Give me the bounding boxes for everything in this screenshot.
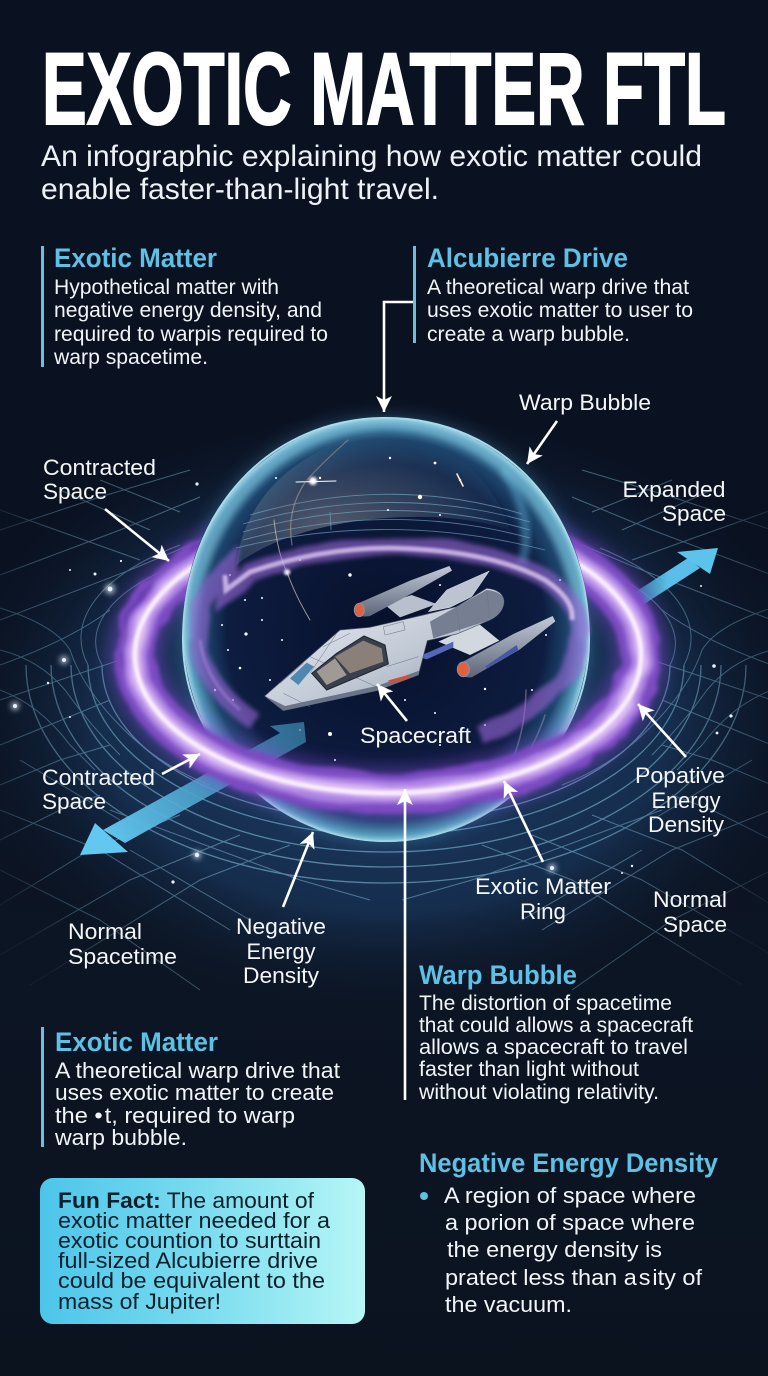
- panel: alcubierre drive: Alcubierre Drive: [427, 243, 628, 273]
- hull: [265, 588, 504, 711]
- inner ring seen through bubble: [198, 546, 581, 735]
- subtitle: [41, 140, 702, 206]
- sparkle star cores: [284, 477, 317, 575]
- panel: exotic matter top: required to warpis required to: [54, 323, 328, 346]
- dorsal fin: [428, 571, 489, 612]
- arrow: spacecraft: [377, 684, 407, 721]
- callout: fun fact: [40, 1178, 365, 1324]
- panel: warp bubble: allows a spacecraft to travel: [419, 1036, 688, 1059]
- arrow: exotic matter ring: [504, 781, 543, 862]
- label: contracted space lower: Contracted: [42, 765, 155, 790]
- label: negative energy density: Density: [243, 963, 319, 988]
- panel: warp bubble: without violating relativity.: [418, 1081, 659, 1104]
- connector arrow: alcubierre drive: [384, 302, 413, 412]
- label: contracted space lower: [42, 765, 155, 814]
- callout: fun fact: mass of Jupiter!: [58, 1289, 221, 1314]
- panel: alcubierre drive: create a warp bubble.: [427, 323, 630, 346]
- label: normal space: [653, 887, 727, 937]
- panel: alcubierre drive: [413, 243, 693, 346]
- label: contracted space upper: [43, 455, 156, 504]
- label: normal spacetime: Spacetime: [68, 944, 177, 969]
- label: positive energy density: Density: [648, 812, 724, 837]
- label: expanded space: [622, 477, 726, 526]
- label: normal spacetime: [68, 919, 177, 969]
- panel: warp bubble: that could allows a spacecraft: [419, 1014, 693, 1037]
- panel: exotic matter top: [41, 243, 328, 369]
- windshield: [290, 663, 314, 685]
- panel: warp bubble: Warp Bubble: [419, 960, 577, 990]
- hull panel lines: [280, 590, 490, 707]
- callout: fun fact: Fun Fact: The amount of: [58, 1188, 315, 1213]
- arrow: contracted space lower: [162, 754, 200, 774]
- blue arrow: expanded space direction: [620, 548, 718, 612]
- label: contracted space lower: Space: [42, 789, 106, 814]
- panel: warp bubble: faster than light without: [419, 1058, 639, 1081]
- blue arrow: contracted space direction: [80, 722, 306, 855]
- panel: exotic matter top: negative energy density, and: [54, 299, 322, 322]
- panel: negative energy density: pratect less than a s ity of: [445, 1265, 703, 1290]
- panel: exotic matter top: Hypothetical matter with: [54, 276, 279, 299]
- cockpit: [312, 636, 388, 690]
- label: contracted space upper: Space: [43, 479, 107, 504]
- spacetime background glow: [0, 420, 768, 1000]
- arrow: positive energy density: [638, 704, 686, 757]
- panel: exotic matter lower: warp bubble.: [54, 1125, 187, 1150]
- star glows: [11, 584, 556, 872]
- spacetime grid: [0, 470, 768, 990]
- subtitle: An infographic explaining how exotic matter could: [41, 140, 702, 173]
- lower wing and nacelle: [418, 616, 555, 677]
- label: normal space: Normal: [653, 887, 727, 912]
- engine section: [430, 590, 504, 638]
- red marking: [388, 675, 410, 684]
- panel: warp bubble: [418, 960, 693, 1104]
- panel: negative energy density: Negative Energy Density: [419, 1148, 718, 1178]
- panel: negative energy density: A region of space where: [444, 1183, 696, 1208]
- panel: warp bubble: The distortion of spacetime: [419, 992, 672, 1015]
- label: warp bubble: Warp Bubble: [519, 390, 651, 415]
- arrow: warp bubble: [527, 421, 557, 464]
- label: expanded space: Space: [662, 501, 726, 526]
- upper nacelle: [354, 566, 452, 617]
- panel: exotic matter top: warp spacetime.: [53, 346, 208, 369]
- label: positive energy density: [635, 763, 725, 837]
- exotic matter ring: [124, 506, 648, 798]
- label: expanded space: Expanded: [622, 477, 726, 502]
- label: spacecraft: Spacecraft: [360, 723, 471, 748]
- warp bubble: [183, 418, 589, 842]
- panel: exotic matter lower: Exotic Matter: [55, 1027, 218, 1057]
- panel: exotic matter lower: uses exotic matter to create: [55, 1080, 334, 1105]
- panel: exotic matter lower: the • t, required to warp: [55, 1103, 295, 1128]
- callout: fun fact: exotic matter needed for a: [58, 1208, 330, 1233]
- callout: fun fact: exotic countion to surttain: [58, 1228, 321, 1253]
- panel: alcubierre drive: uses exotic matter to user to: [427, 299, 693, 322]
- connector arrow: warp bubble panel: [404, 789, 406, 1100]
- label: positive energy density: Energy: [652, 788, 720, 813]
- callout: fun fact: full-sized Alcubierre drive: [58, 1248, 318, 1273]
- panel: negative energy density: the vacuum.: [445, 1292, 572, 1317]
- label: negative energy density: Negative: [236, 914, 326, 939]
- label: normal spacetime: Normal: [68, 919, 142, 944]
- label: exotic matter ring: Ring: [520, 899, 566, 924]
- label: negative energy density: Energy: [246, 939, 316, 964]
- panel: alcubierre drive: A theoretical warp drive that: [427, 276, 689, 299]
- label: exotic matter ring: [475, 874, 611, 924]
- label: negative energy density: [236, 914, 326, 988]
- subtitle: enable faster-than-light travel.: [41, 173, 439, 206]
- panel: negative energy density: [419, 1148, 718, 1317]
- arrow: negative energy density: [283, 832, 313, 907]
- hull underside: [265, 671, 419, 711]
- panel: negative energy density: a porion of space where: [445, 1210, 695, 1235]
- panel: negative energy density: the energy density is: [447, 1237, 662, 1262]
- sparkle stars: [274, 440, 545, 775]
- panel: exotic matter lower: [41, 1027, 341, 1150]
- callout: fun fact: could be equivalent to the: [58, 1268, 325, 1293]
- spacecraft: [265, 566, 555, 711]
- panel: exotic matter lower: A theoretical warp drive that: [55, 1058, 341, 1083]
- label: normal space: Space: [663, 912, 727, 937]
- background stars: [13, 482, 733, 884]
- label: positive energy density: Popative: [635, 763, 725, 788]
- label: exotic matter ring: Exotic Matter: [475, 874, 611, 899]
- panel: exotic matter top: Exotic Matter: [54, 243, 217, 273]
- label: contracted space upper: Contracted: [43, 455, 156, 480]
- arrow: contracted space upper: [105, 509, 169, 561]
- stars inside bubble: [214, 457, 561, 761]
